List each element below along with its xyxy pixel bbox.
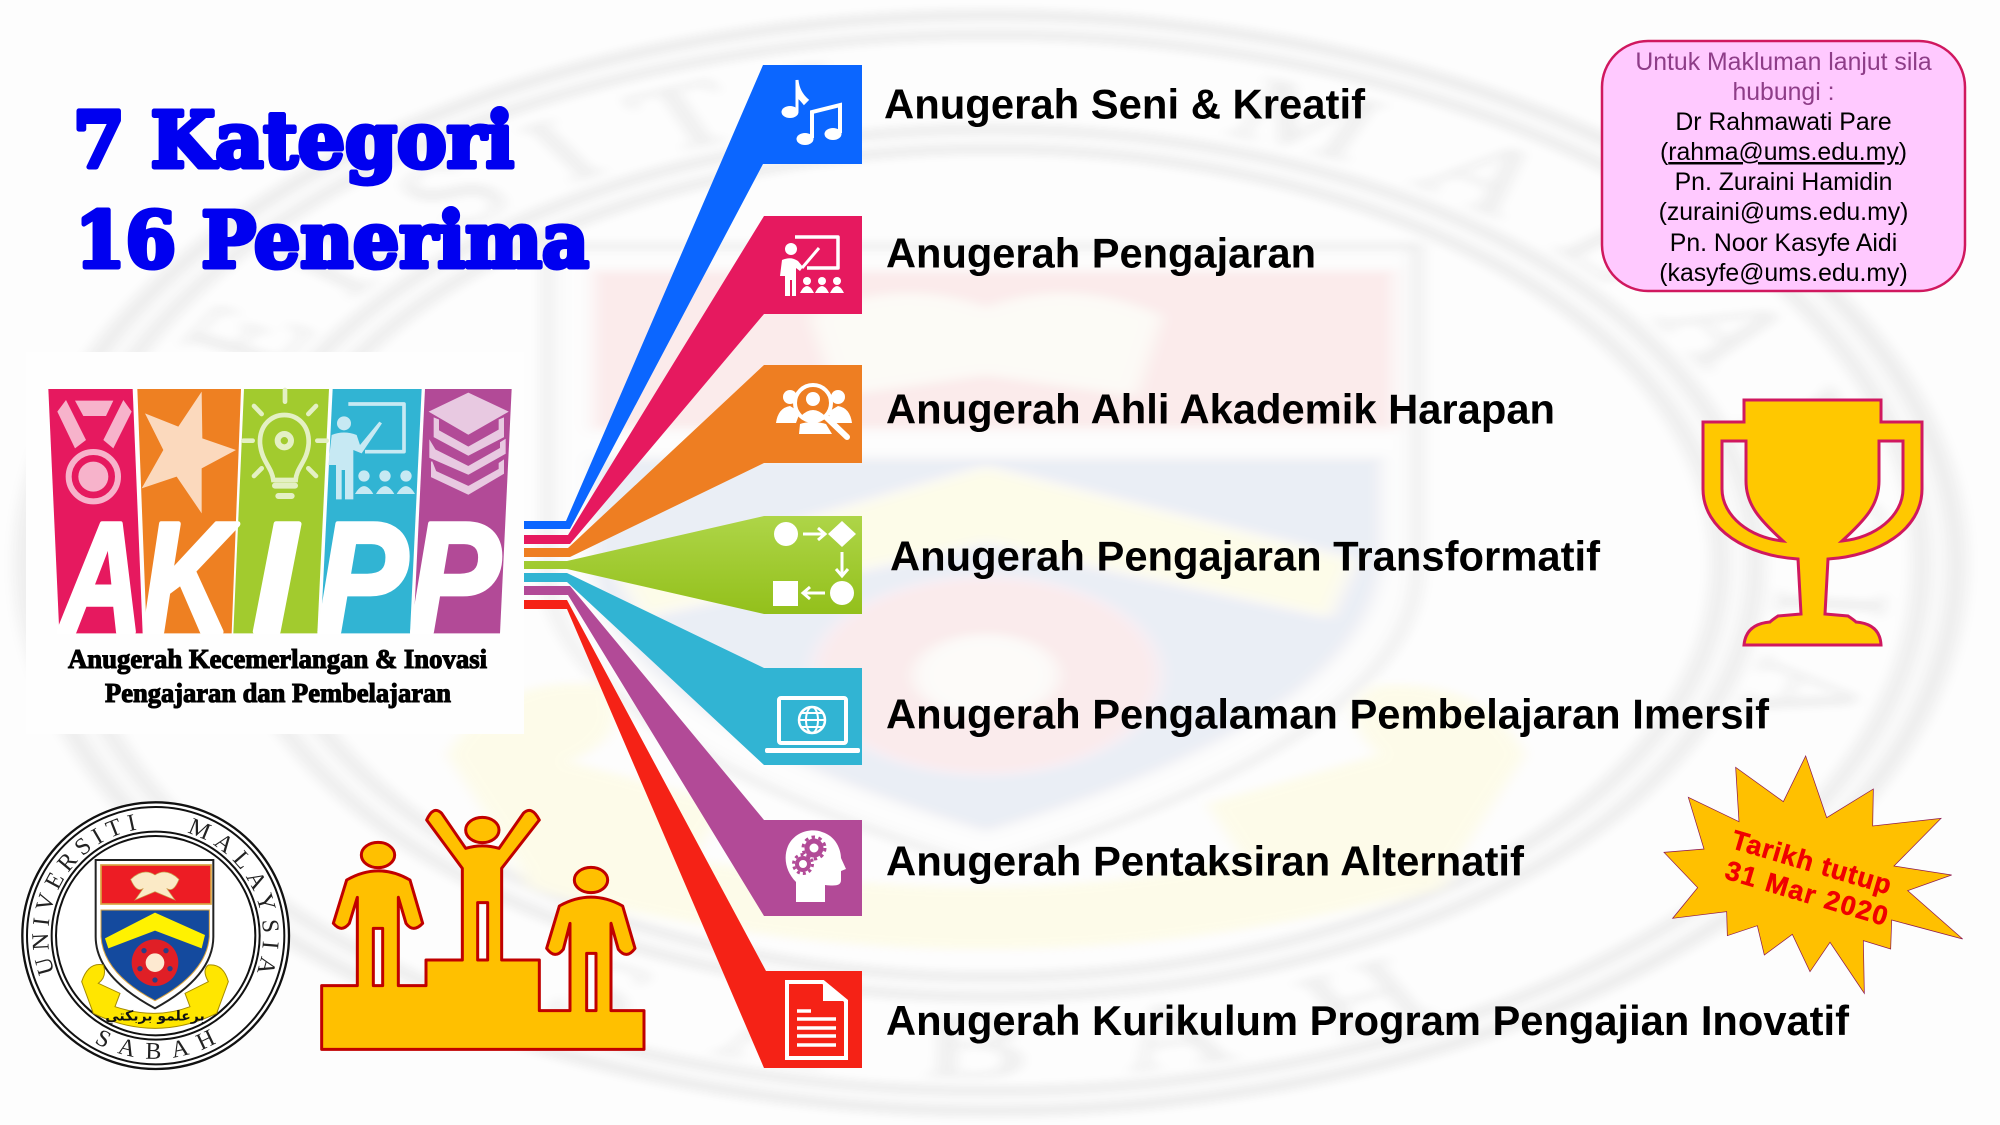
icon: books [430,393,507,494]
icon: medal [57,400,132,501]
university crest: برعلمو بربکتي [105,1009,205,1025]
podium with three figures [322,810,644,1049]
logo letters AKIPP: P [317,490,408,665]
white panel behind the AKIPP logo [26,352,524,734]
contact panel [1602,41,1965,291]
background watermark: university crest: MALAYSIA [1269,82,1882,709]
category label: Anugerah Seni & Kreatif [884,80,1366,128]
logo caption: Pengajaran dan Pembelajaran [105,678,451,708]
category label: Anugerah Pengajaran [886,230,1316,276]
contact panel: Dr Rahmawati Pare [1675,109,1892,136]
deadline starburst: 31 Mar 2020 [1722,855,1891,932]
icon: teacher [780,237,844,296]
logo caption [68,644,487,708]
category label: Anugerah Pengajaran Transformatif [890,532,1601,580]
icon: laptop with globe [765,698,860,753]
icon: trophy [1703,400,1922,645]
contact panel: (kasyfe@ums.edu.my) [1659,260,1908,287]
icon: head with gears [786,830,846,902]
title: 7 Kategori [73,96,514,186]
icon: document [787,982,846,1058]
logo letters AKIPP: A [58,489,142,665]
category label: Anugerah Kurikulum Program Pengajian Inovatif [886,997,1850,1044]
logo colour stripes [48,389,512,633]
logo letters AKIPP: P [410,490,500,665]
university crest: UNIVERSITI [32,814,136,976]
icon: light bulb [243,390,327,496]
icon: star [142,392,236,513]
category connector: Pentaksiran Alternatif (purple) [524,586,862,916]
category connector: Pengalaman Imersif (cyan) [524,573,862,765]
logo letters AKIPP [58,489,500,666]
category label: Anugerah Ahli Akademik Harapan [886,386,1555,432]
university crest [21,801,290,1070]
logo letters AKIPP: I [253,491,300,666]
category connector: Kurikulum Program (red) [524,600,862,1068]
university crest: SABAH [96,1029,216,1059]
contact panel: Pn. Noor Kasyfe Aidi [1670,230,1897,257]
university crest: MALAYSIA [188,818,279,972]
category connector: Ahli Akademik (orange) [524,365,862,557]
contact panel: hubungi : [1732,79,1835,106]
icon: teacher and students [328,404,415,499]
title: 16 Penerima [75,196,589,286]
deadline starburst: Tarikh tutup [1728,825,1895,900]
AKIPP logo [48,389,512,666]
logo caption: Anugerah Kecemerlangan & Inovasi [68,644,487,674]
deadline starburst [1664,756,1963,993]
icon: process flow [773,521,856,606]
icon: people with magnifier [776,385,852,437]
logo letters AKIPP: K [143,490,238,665]
icon: music notes [782,80,842,145]
category label: Anugerah Pengalaman Pembelajaran Imersif [886,690,1770,738]
title [73,96,589,286]
category connector: Pengajaran (pink) [524,216,862,544]
contact panel: (zuraini@ums.edu.my) [1659,199,1908,226]
contact panel: Pn. Zuraini Hamidin [1675,169,1892,196]
category label: Anugerah Pentaksiran Alternatif [886,838,1525,884]
category connector: Seni & Kreatif (blue) [524,65,862,529]
contact panel: Untuk Makluman lanjut sila [1635,49,1932,76]
background watermark: university crest: SABAH [612,963,1422,1076]
contact panel: (rahma@ums.edu.my) [1660,139,1907,166]
category connector: Pengajaran Transformatif (green) [524,516,862,614]
background watermark: university crest: UNIVERSITI [190,88,710,352]
